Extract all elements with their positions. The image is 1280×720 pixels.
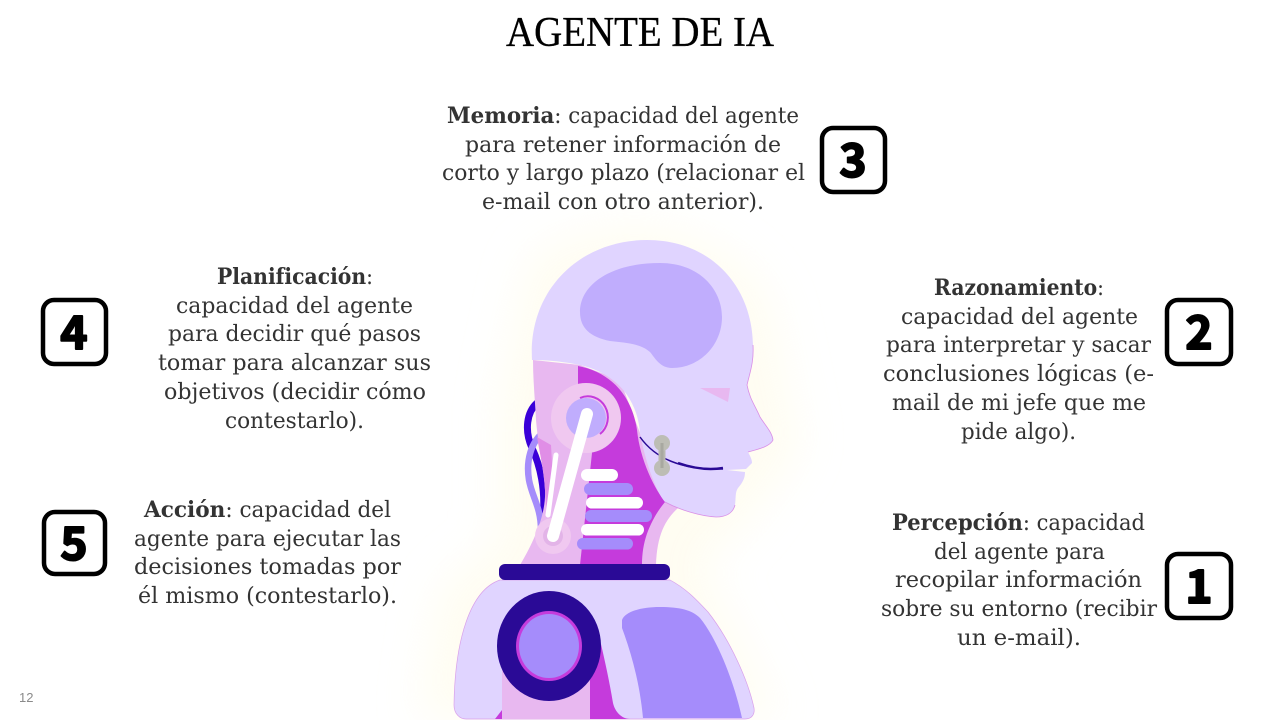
text: Planificación: Planificación: <box>217 264 373 290</box>
text: Memoria: e-mail con otro anterior). <box>482 190 764 215</box>
collar <box>499 564 670 580</box>
number badge 4: 4 <box>60 297 88 363</box>
text: Planificación: tomar para alcanzar sus <box>158 351 431 376</box>
text: Percepción: sobre su entorno (recibir <box>881 597 1157 622</box>
number badge 4 <box>43 297 106 364</box>
lower joint <box>535 518 571 554</box>
face edge line <box>665 345 773 517</box>
text: Acción <box>134 497 401 609</box>
text: Razonamiento: conclusiones lógicas (e- <box>883 362 1154 387</box>
text: Acción: agente para ejecutar las <box>134 527 401 552</box>
text: Planificación: contestarlo). <box>225 409 364 434</box>
text: Percepción <box>881 510 1157 651</box>
number badge 1 <box>1167 551 1231 618</box>
number badge 2 <box>1167 297 1231 364</box>
torso pink panel <box>502 665 590 719</box>
ear ring <box>551 383 621 453</box>
text: Razonamiento <box>883 275 1154 445</box>
number badge 3 <box>822 125 885 192</box>
number badge 1: 1 <box>1185 551 1213 617</box>
neck wires <box>527 403 545 530</box>
text: Memoria <box>442 103 805 215</box>
number badge 2: 2 <box>1185 297 1213 363</box>
text: Planificación: capacidad del agente <box>176 294 413 319</box>
neck bars <box>577 469 652 550</box>
text: Acción: decisiones tomadas por <box>134 555 401 580</box>
text: Planificación <box>158 264 431 434</box>
number badge 5: 5 <box>60 508 88 574</box>
text: Acción: él mismo (contestarlo). <box>138 584 397 609</box>
text: Acción: Acción: capacidad del <box>143 497 391 523</box>
text: Razonamiento: pide algo). <box>961 420 1076 445</box>
torso magenta panel <box>495 640 630 719</box>
text: Planificación: objetivos (decidir cómo <box>164 380 426 405</box>
text: Memoria: corto y largo plazo (relacionar el <box>442 161 805 186</box>
number badge 5 <box>44 508 105 574</box>
text: Razonamiento: mail de mi jefe que me <box>892 391 1146 416</box>
illustration: AI agent robot bust <box>420 228 800 720</box>
soft yellow glow <box>420 228 800 720</box>
neck <box>520 360 678 565</box>
shoulder panel <box>622 607 742 718</box>
torso <box>454 580 754 719</box>
text: Percepción: recopilar información <box>895 568 1142 593</box>
text: Razonamiento: Razonamiento: <box>934 275 1104 301</box>
text: Percepción: Percepción: capacidad <box>892 510 1145 536</box>
text: Planificación: para decidir qué pasos <box>168 322 421 347</box>
page number: 12 <box>19 690 33 705</box>
text: Memoria: para retener información de <box>465 133 781 158</box>
title: AGENTE DE IA <box>506 10 775 56</box>
text: Percepción: del agente para <box>934 540 1105 565</box>
chest ring <box>497 591 601 701</box>
number badge 3: 3 <box>839 125 867 191</box>
text: Razonamiento: para interpretar y sacar <box>886 333 1151 358</box>
brain <box>580 263 722 368</box>
text: Razonamiento: capacidad del agente <box>901 305 1138 330</box>
text: Memoria: Memoria: capacidad del agente <box>447 103 799 129</box>
jaw line and joint <box>640 435 723 476</box>
text: Percepción: un e-mail). <box>957 626 1081 651</box>
head <box>532 240 773 517</box>
white rods <box>548 414 587 536</box>
eye <box>700 388 730 402</box>
